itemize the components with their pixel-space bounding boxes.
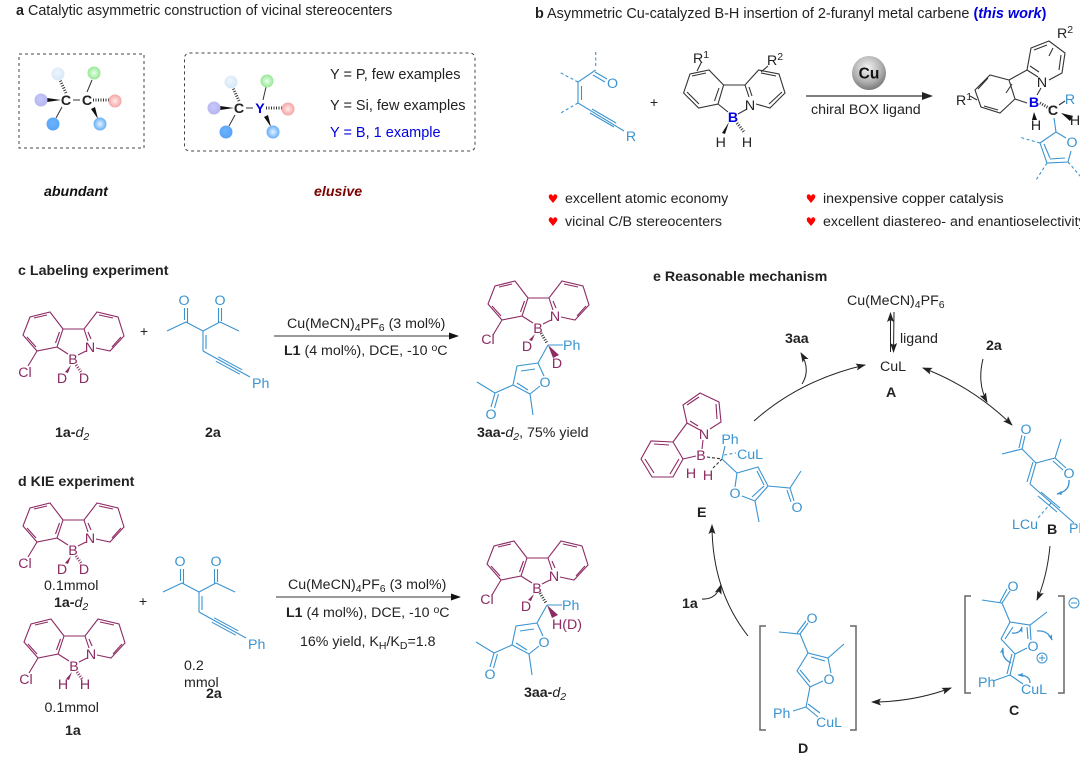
intermediate D with bracket: Ph [773, 706, 790, 722]
arrow: 1a entry [702, 585, 721, 599]
conditions top: (3 mol%) [386, 577, 446, 593]
substrate 2a [167, 293, 269, 392]
substrate 1a: B [69, 659, 79, 675]
product 3aa-d2: N [550, 309, 560, 325]
amount: 0.2 mmol: 0.2 [184, 658, 204, 674]
substrate: pyridine borane: H [742, 135, 752, 151]
product 3aa-d2: Ph [562, 598, 579, 614]
text: Y = B: Y = B, 1 example [330, 125, 441, 141]
molecule: C-C stereocentres: C [82, 93, 92, 109]
intermediate C with bracket: O [1007, 579, 1019, 595]
substrate 1a-d2: D [57, 371, 67, 387]
substrate: pyridine borane [684, 49, 785, 151]
text: chiral BOX ligand: chiral BOX ligand [811, 102, 921, 118]
panel c: labeling experiment [18, 263, 589, 443]
arrow: D to E [712, 525, 748, 636]
product 3aa-d2: O [484, 667, 496, 683]
label: 2a: 2a [205, 425, 221, 441]
substrate 1a: Cl [19, 672, 33, 688]
product 3aa-d2: Ph [563, 338, 580, 354]
label: 3aa-d2 yield: 2 [512, 431, 519, 443]
catalyst ball: Cu: Cu [859, 66, 879, 82]
product 3aa-d2: B [533, 321, 543, 337]
heading a: a Catalytic asymmetric construction of vicinal stereocenters [16, 3, 392, 19]
equilibrium arrows [890, 312, 894, 352]
label: 1a-d2: 2 [82, 431, 89, 443]
arrow: A to B [923, 368, 1012, 425]
arrow: C and D equilibrium [872, 688, 951, 702]
substrate 1a-d2: Cl [18, 556, 32, 572]
substrate: pyridine borane: N [745, 98, 755, 114]
substrate: pyridine borane: 2 [777, 51, 783, 63]
heading e: e Reasonable mechanism [653, 269, 827, 285]
conditions bottom: yield and KIE: H [379, 640, 386, 652]
catalyst ball: Cu [852, 56, 886, 90]
intermediate D with bracket: CuL [816, 715, 842, 731]
label: A: A [886, 385, 896, 401]
substrate: pyridine borane: 1 [703, 49, 709, 61]
substrate 2a: O [214, 293, 226, 309]
product: chiral furan borane: R [1057, 26, 1067, 42]
panel d: KIE experiment [18, 474, 588, 739]
conditions bottom: yield and KIE: =1.8 [407, 634, 436, 650]
label: 3aa-d2: 2 [559, 691, 566, 703]
product 3aa-d2: D [522, 339, 532, 355]
substrate 1a-d2: N [85, 531, 95, 547]
intermediate B: O [1063, 466, 1075, 482]
intermediate E: H [703, 468, 713, 484]
conditions top: 6 [379, 322, 385, 334]
product: chiral furan borane: R [1065, 92, 1075, 108]
label: 2a: 2a [986, 338, 1002, 354]
heading d: d KIE experiment [18, 474, 135, 490]
bullet: copper catalysis: ♥ [806, 192, 816, 206]
product 3aa-d2 [476, 541, 588, 683]
intermediate B [1002, 422, 1080, 537]
bullet: stereocenters: ♥ [548, 215, 558, 229]
label: E: E [697, 505, 706, 521]
reaction arrow [806, 92, 933, 100]
intermediate E: B [696, 448, 706, 464]
label: 1a-d2: 2 [81, 601, 88, 613]
amount: 0.2 mmol: mmol [184, 675, 219, 691]
substrate 2a: O [178, 293, 190, 309]
label: D: D [798, 741, 808, 757]
conditions bottom: L1 (4 mol%), DCE, -10 [284, 343, 428, 359]
label: 3aa: 3aa [785, 331, 809, 347]
amount: 0.1 mmol: 0.1mmol [44, 578, 98, 594]
reaction arrow [276, 594, 461, 600]
dashed box: abundant C-C [19, 54, 144, 148]
conditions bottom: yield and KIE: 16% yield, K [300, 634, 379, 650]
molecule: C-Y stereocentres: Y [255, 101, 265, 117]
product: chiral furan borane: H [1070, 113, 1080, 129]
plus sign: + [139, 594, 147, 610]
intermediate C with bracket: O [1027, 639, 1039, 655]
product 3aa-d2: H(D) [552, 617, 582, 633]
intermediate D with bracket: O [806, 611, 818, 627]
bullet: atomic economy: excellent atomic economy [565, 191, 729, 207]
label: C: C [1009, 703, 1019, 719]
intermediate B: LCu [1012, 517, 1038, 533]
conditions bottom: yield and KIE: /K [386, 634, 400, 650]
panel b: Cu-catalyzed B-H insertion [535, 6, 1080, 230]
conditions bottom: C [437, 343, 448, 359]
intermediate D with bracket [760, 611, 856, 731]
bullet: atomic economy: ♥ [548, 192, 558, 206]
substrate 1a: N [86, 647, 96, 663]
molecule: C-C stereocentres [34, 66, 122, 130]
substrate: pyridine borane: R [693, 51, 703, 67]
product: chiral furan borane: 1 [966, 91, 972, 103]
label: 1a-d2: 1a-d [54, 595, 82, 611]
label: abundant: abundant [44, 184, 109, 200]
product 3aa-d2: O [485, 407, 497, 423]
substrate 2a: Ph [248, 637, 265, 653]
conditions bottom: yield and KIE: D [400, 640, 408, 652]
product 3aa-d2 [477, 281, 589, 423]
substrate 1a-d2: D [79, 562, 89, 578]
label: elusive: elusive [314, 184, 362, 200]
intermediate C with bracket: Ph [978, 675, 995, 691]
substrate 1a-d2 [18, 503, 124, 578]
substrate 1a-d2: B [68, 352, 78, 368]
substrate 1a-d2: B [68, 543, 78, 559]
heading c: c Labeling experiment [18, 263, 169, 279]
arrow: 2a entry [981, 359, 987, 402]
substrate: pyridine borane: R [767, 53, 777, 69]
substrate: enynone [559, 52, 636, 145]
product 3aa-d2: Cl [481, 332, 495, 348]
substrate 1a-d2: D [79, 371, 89, 387]
substrate 2a: Ph [252, 376, 269, 392]
substrate 1a [19, 619, 125, 693]
text: Y = P: Y = P, few examples [330, 67, 460, 83]
product: chiral furan borane: H [1031, 118, 1041, 134]
product: chiral furan borane: 2 [1067, 24, 1073, 36]
conditions top: PF [362, 577, 380, 593]
heading b: b Asymmetric Cu-catalyzed B-H insertion of 2-furanyl metal carbene (this work) [535, 6, 1047, 22]
text: Y = Si: Y = Si, few examples [330, 98, 466, 114]
bullet: stereocenters: vicinal C/B stereocenters [565, 214, 722, 230]
label: B: B [1047, 522, 1057, 538]
label: 3aa-d2 yield: 3aa-d [477, 425, 513, 441]
plus sign: + [650, 95, 658, 111]
product: chiral furan borane: R [956, 93, 966, 109]
conditions top: (3 mol%) [385, 316, 445, 332]
label: 1a-d2: 1a-d [55, 425, 83, 441]
intermediate E: Ph [721, 432, 739, 448]
product: chiral furan borane: C [1048, 103, 1058, 119]
intermediate B: O [1020, 422, 1032, 438]
product: chiral furan borane [956, 24, 1080, 180]
label: 1a: 1a [682, 596, 698, 612]
substrate: enynone: R [626, 129, 636, 145]
substrate 1a-d2: N [85, 340, 95, 356]
bullet: selectivity: ♥ [806, 215, 816, 229]
label: 3aa-d2: 3aa-d [524, 685, 560, 701]
conditions top: 6 [380, 583, 386, 595]
product 3aa-d2: B [532, 581, 542, 597]
molecule: C-C stereocentres: C [61, 93, 71, 109]
label: 2a: 2a [206, 686, 222, 702]
product 3aa-d2: O [538, 635, 550, 651]
conditions middle: C [439, 605, 450, 621]
precatalyst: 6 [939, 299, 945, 311]
panel a: vicinal stereocenters [16, 3, 475, 200]
intermediate E: N [699, 427, 709, 443]
product: chiral furan borane: B [1029, 95, 1039, 111]
intermediate C with bracket [965, 579, 1079, 698]
substrate 1a: H [80, 677, 90, 693]
intermediate C with bracket: CuL [1021, 682, 1047, 698]
conditions middle: o [433, 604, 439, 616]
bullet: selectivity: excellent diastereo- and enantioselectivity [823, 214, 1080, 230]
label: 1a: 1a [65, 723, 81, 739]
substrate 2a: O [210, 554, 222, 570]
product 3aa-d2: D [521, 599, 531, 615]
plus sign: + [140, 324, 148, 340]
bullet: copper catalysis: inexpensive copper catalysis [823, 191, 1004, 207]
label: 3aa-d2 yield: , 75% yield [519, 425, 589, 441]
intermediate E: CuL [737, 447, 763, 463]
intermediate E: O [791, 500, 803, 516]
dashed box: elusive C-Y [184, 53, 475, 151]
product: chiral furan borane: O [1066, 135, 1078, 151]
precatalyst: PF [921, 293, 939, 309]
substrate 1a-d2: D [57, 562, 67, 578]
conditions top: Cu(MeCN) [287, 316, 355, 332]
intermediate E: H [686, 466, 696, 482]
intermediate D with bracket: O [823, 672, 835, 688]
text: ligand: ligand [900, 331, 938, 347]
conditions top: Cu(MeCN) [288, 577, 356, 593]
precatalyst: Cu(MeCN) [847, 293, 915, 309]
conditions middle: L1 (4 mol%), DCE, -10 [286, 605, 430, 621]
amount: 0.1 mmol: 0.1mmol [44, 700, 99, 716]
arrow: 3aa release [801, 353, 806, 384]
conditions top: 4 [356, 583, 362, 595]
substrate 2a [163, 554, 265, 653]
substrate: pyridine borane: B [728, 110, 738, 126]
arrow: E to A [754, 365, 865, 421]
substrate: enynone: O [607, 76, 618, 92]
substrate: pyridine borane: H [716, 135, 726, 151]
substrate 1a: H [58, 677, 68, 693]
product 3aa-d2: D [552, 356, 562, 372]
conditions top: PF [361, 316, 379, 332]
substrate 2a: O [174, 554, 186, 570]
intermediate E: O [729, 486, 741, 502]
product 3aa-d2: Cl [480, 592, 494, 608]
molecule: C-Y stereocentres: C [234, 101, 244, 117]
panel e: mechanism [641, 269, 1080, 757]
reaction arrow [274, 332, 459, 340]
product 3aa-d2: O [539, 375, 551, 391]
precatalyst: 4 [915, 299, 921, 311]
intermediate E [641, 393, 803, 522]
arrow: B to C [1037, 546, 1050, 600]
conditions top: 4 [355, 322, 361, 334]
substrate 1a-d2: Cl [18, 365, 32, 381]
substrate 1a-d2 [18, 312, 124, 387]
product 3aa-d2: N [549, 569, 559, 585]
conditions bottom: o [431, 342, 437, 354]
molecule: C-Y stereocentres [208, 74, 294, 138]
catalyst CuL: CuL [880, 359, 906, 375]
product: chiral furan borane: N [1037, 75, 1047, 91]
